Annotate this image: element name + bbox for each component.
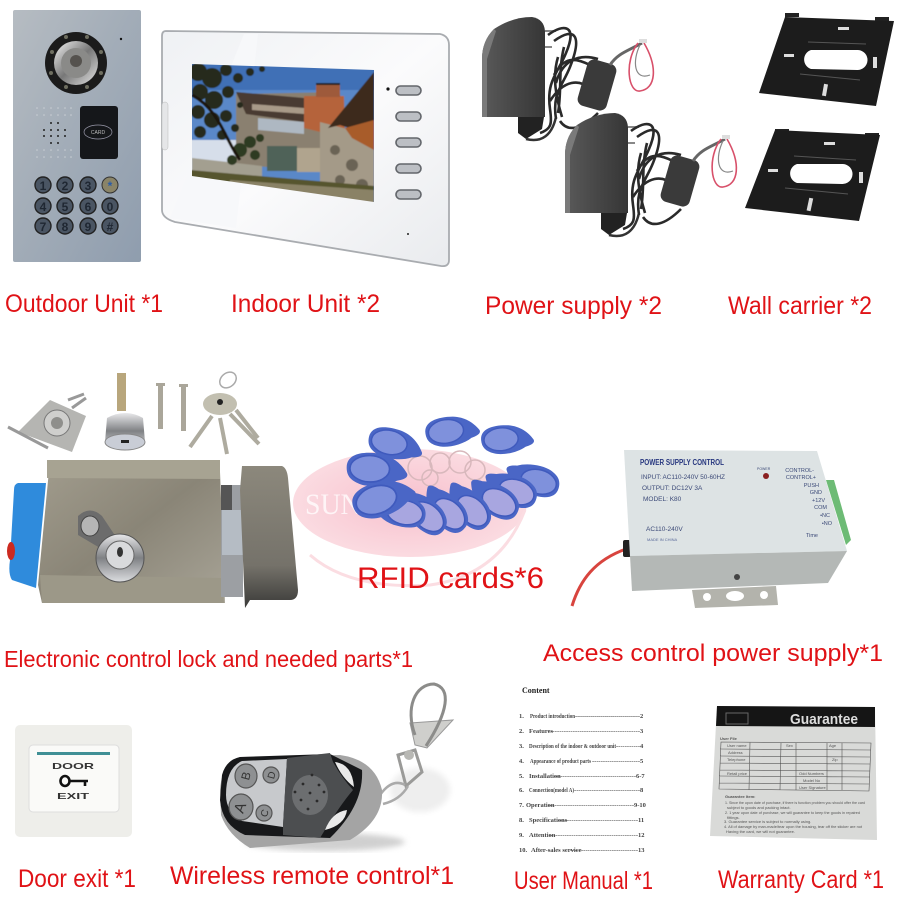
keypad: * xyxy=(108,179,113,193)
label: user manual: User Manual *1 xyxy=(514,867,653,895)
box specifications: MADE IN CHINA xyxy=(647,537,678,542)
label: access control power supply: Access control power supply*1 xyxy=(543,640,883,667)
remote body xyxy=(220,755,382,848)
card terms xyxy=(724,794,865,834)
manual contents list: 3. xyxy=(519,743,524,750)
manual contents list: 4 xyxy=(640,743,644,750)
card table xyxy=(719,742,871,791)
panel: lock parts xyxy=(7,369,298,608)
manual contents list: Operation xyxy=(526,802,555,809)
card terms: 4. All of damage by man-made/tear upon the housing, tear off the sticker are not xyxy=(724,824,863,829)
power led xyxy=(757,467,771,479)
outdoor unit faceplate xyxy=(13,10,141,262)
card terms: Guarantee Item: xyxy=(725,794,755,799)
card terms: 1. Since the upon date of purchase, if there is function problem you should offer the card xyxy=(725,800,865,805)
manual contents list: 1. xyxy=(519,713,524,720)
keys xyxy=(190,369,259,454)
terminal labels: +12V xyxy=(812,498,825,504)
label: power supply: Power supply *2 xyxy=(485,292,662,320)
keypad: 9 xyxy=(85,220,92,234)
speaker grille xyxy=(36,107,72,158)
manual contents list: ------------------------------- xyxy=(570,847,638,854)
remote button plate xyxy=(226,759,287,827)
manual contents list: 6. xyxy=(519,787,524,794)
terminal block xyxy=(826,480,851,545)
manual contents list: Features xyxy=(529,728,554,735)
manual contents list: ---------------------------------------- xyxy=(549,832,638,839)
card header xyxy=(716,706,875,727)
logo watermark: SUNFLOWER xyxy=(305,488,475,521)
lock bolt xyxy=(221,485,243,597)
manual contents list: 13 xyxy=(638,847,645,854)
terminal labels: CONTROL+ xyxy=(786,475,816,481)
manual contents list: ------------------------------ xyxy=(574,787,640,794)
card sheet xyxy=(710,706,877,840)
manual contents list: ----------- xyxy=(616,743,640,750)
card terms: 3. Guarantee service is subject to normally using. xyxy=(724,819,811,824)
wall carrier 2 xyxy=(745,129,880,221)
card terms: fittings. xyxy=(727,815,740,820)
lock key knob xyxy=(96,534,144,582)
logo swoosh xyxy=(310,510,525,586)
box specifications: AC110-240V xyxy=(646,526,683,533)
manual contents list: -------------------------------------- xyxy=(554,773,636,780)
manual contents list: ---------------------- xyxy=(592,758,640,765)
panel: RFID cards xyxy=(293,413,563,586)
terminal labels: COM xyxy=(814,505,827,511)
panel: warranty card xyxy=(710,706,877,840)
remote button letters: C xyxy=(259,808,272,819)
manual contents list: 7. xyxy=(519,802,524,809)
card terms: Having the card, we will not guarantee. xyxy=(726,829,795,834)
RFID reader xyxy=(80,106,118,159)
red wire xyxy=(572,549,626,606)
card table: Odd Numbers xyxy=(799,771,824,776)
mounting plate xyxy=(8,394,86,452)
power led: POWER xyxy=(757,467,771,471)
manual contents list: 8. xyxy=(519,817,524,824)
manual contents list: Attention xyxy=(529,832,556,839)
keypad: 0 xyxy=(107,200,114,214)
manual contents list: 2 xyxy=(640,713,643,720)
keypad: 3 xyxy=(85,179,92,193)
label: door exit: Door exit *1 xyxy=(18,865,136,893)
keypad: 2 xyxy=(62,179,69,193)
box specifications: INPUT: AC110-240V 50-60HZ xyxy=(641,474,725,481)
manual contents list: 5 xyxy=(640,758,644,765)
lock button xyxy=(78,510,118,548)
keypad: 8 xyxy=(62,220,69,234)
panel: power supplies xyxy=(482,17,736,236)
keypad: 6 xyxy=(85,200,92,214)
lock cylinder xyxy=(105,373,145,450)
manual contents list: 2. xyxy=(519,728,524,735)
box top xyxy=(624,450,847,556)
power adapter 2 xyxy=(565,113,736,236)
speaker dome xyxy=(292,775,328,815)
card table: Model No xyxy=(803,778,821,783)
logo ellipse xyxy=(293,449,527,557)
manual contents list: ----------------------------------------- xyxy=(548,728,640,735)
panel: indoor unit xyxy=(162,31,449,266)
manual contents list: 10. xyxy=(519,847,528,854)
manual contents list xyxy=(519,713,646,854)
manual contents list: 8 xyxy=(640,787,644,794)
box specifications: OUTPUT: DC12V 3A xyxy=(642,485,703,492)
terminal labels: CONTROL- xyxy=(785,468,814,474)
user file caption: User File xyxy=(720,736,738,741)
card table: Age xyxy=(829,743,837,748)
manual heading: Content xyxy=(522,686,550,695)
manual contents list: 9. xyxy=(519,832,524,839)
remote buttons xyxy=(229,764,279,821)
manual contents list: --------------------------------------- xyxy=(548,802,634,809)
terminal labels: •NC xyxy=(820,513,830,519)
manual contents list: Description of the indoor & outdoor unit xyxy=(529,743,617,750)
remote button letters: A xyxy=(231,800,250,815)
panel: door exit button xyxy=(15,725,132,837)
manual contents list: 9-10 xyxy=(634,802,646,809)
RFID fobs xyxy=(346,413,563,541)
cable grommet xyxy=(623,540,631,557)
box specifications xyxy=(641,474,725,542)
manual contents list: Specifications xyxy=(529,817,568,824)
camera lens xyxy=(45,32,107,94)
label: RFID cards: RFID cards*6 xyxy=(357,562,544,595)
label: outdoor unit: Outdoor Unit *1 xyxy=(5,290,163,318)
remote grip holes xyxy=(325,762,354,830)
terminal labels xyxy=(785,468,833,539)
lock strike plate xyxy=(240,466,298,608)
manual contents list: 5. xyxy=(519,773,524,780)
manual contents list: 3 xyxy=(640,728,644,735)
lock body xyxy=(38,460,225,603)
keypad: 7 xyxy=(40,220,47,234)
monitor glare xyxy=(170,34,258,228)
card table: User name xyxy=(727,743,747,748)
remote button letters: B xyxy=(238,770,254,782)
card title: Guarantee xyxy=(790,711,858,728)
monitor mic slot xyxy=(162,102,168,150)
power adapter 1 xyxy=(482,17,653,140)
monitor buttons xyxy=(396,86,421,199)
screws xyxy=(156,383,188,431)
panel: user manual xyxy=(519,686,646,854)
keypad: 4 xyxy=(40,200,47,214)
lock blue cover xyxy=(9,483,46,588)
terminal labels: •NO xyxy=(822,521,833,527)
door text: DOOR xyxy=(52,761,94,771)
manual contents list: Connection(model A) xyxy=(529,787,574,794)
remote holes xyxy=(294,774,325,810)
exit text: EXIT xyxy=(57,791,90,801)
terminal labels: PUSH xyxy=(804,483,819,489)
manual contents list: Product introduction xyxy=(530,713,575,720)
remote button letters: D xyxy=(266,770,279,780)
manual contents list: --------------------------------- xyxy=(575,713,640,720)
label: wireless remote: Wireless remote control*1 xyxy=(170,862,454,890)
label: indoor unit: Indoor Unit *2 xyxy=(231,290,380,318)
key rings xyxy=(408,451,485,486)
keypad: # xyxy=(107,220,114,234)
remote dark cover xyxy=(283,753,353,838)
card table: User Signature xyxy=(799,785,826,790)
card table: Zip xyxy=(832,757,838,762)
card table: Telephone xyxy=(727,757,746,762)
remote button letters xyxy=(231,770,279,819)
card terms: subject to goods and packing intact. xyxy=(727,805,791,810)
keypad: 5 xyxy=(62,200,69,214)
key clip xyxy=(380,684,453,804)
manual contents list: 12 xyxy=(638,832,644,839)
wall carrier 1 xyxy=(759,13,894,106)
switch button xyxy=(29,745,119,812)
mounting tab xyxy=(692,586,778,608)
panel: wireless remote xyxy=(220,684,453,851)
monitor screen photo xyxy=(189,60,376,205)
box front xyxy=(630,551,847,591)
label: electronic lock: Electronic control lock and needed parts*1 xyxy=(4,646,413,672)
RFID reader: CARD xyxy=(91,130,105,136)
manual contents list: ------------------------------------ xyxy=(558,817,638,824)
chain shadow xyxy=(390,768,450,812)
panel: wall carriers xyxy=(745,13,894,221)
card logo xyxy=(726,713,748,724)
card table: Address xyxy=(728,750,743,755)
card terms: 2. 1 year upon date of purchase, we will guarantee to keep the goods in repaired xyxy=(725,810,860,815)
manual contents list: Appearance of product parts xyxy=(530,758,591,765)
manual contents list: 4. xyxy=(519,758,524,765)
switch plate xyxy=(15,725,132,837)
monitor body xyxy=(162,31,449,266)
manual contents list: 11 xyxy=(638,817,644,824)
indicator strip xyxy=(37,752,110,755)
card table: Sex xyxy=(786,743,793,748)
box specifications: MODEL: K80 xyxy=(643,496,682,503)
remote black frame xyxy=(220,754,362,838)
manual contents list: After-sales service xyxy=(531,847,582,854)
terminal labels: GND xyxy=(810,490,822,496)
manual contents list: Installation xyxy=(529,773,561,780)
icon: key xyxy=(60,776,88,786)
manual contents list: 6-7 xyxy=(636,773,645,780)
card table: Retail price xyxy=(727,771,748,776)
label: wall carrier: Wall carrier *2 xyxy=(728,292,872,320)
panel: access control power supply xyxy=(572,450,851,608)
terminal labels: Time xyxy=(806,533,818,539)
box printed title: POWER SUPPLY CONTROL xyxy=(640,458,724,467)
keypad: 1 xyxy=(40,179,47,193)
keypad xyxy=(35,177,118,234)
ground shadow xyxy=(245,833,405,851)
panel: outdoor unit xyxy=(13,10,141,262)
